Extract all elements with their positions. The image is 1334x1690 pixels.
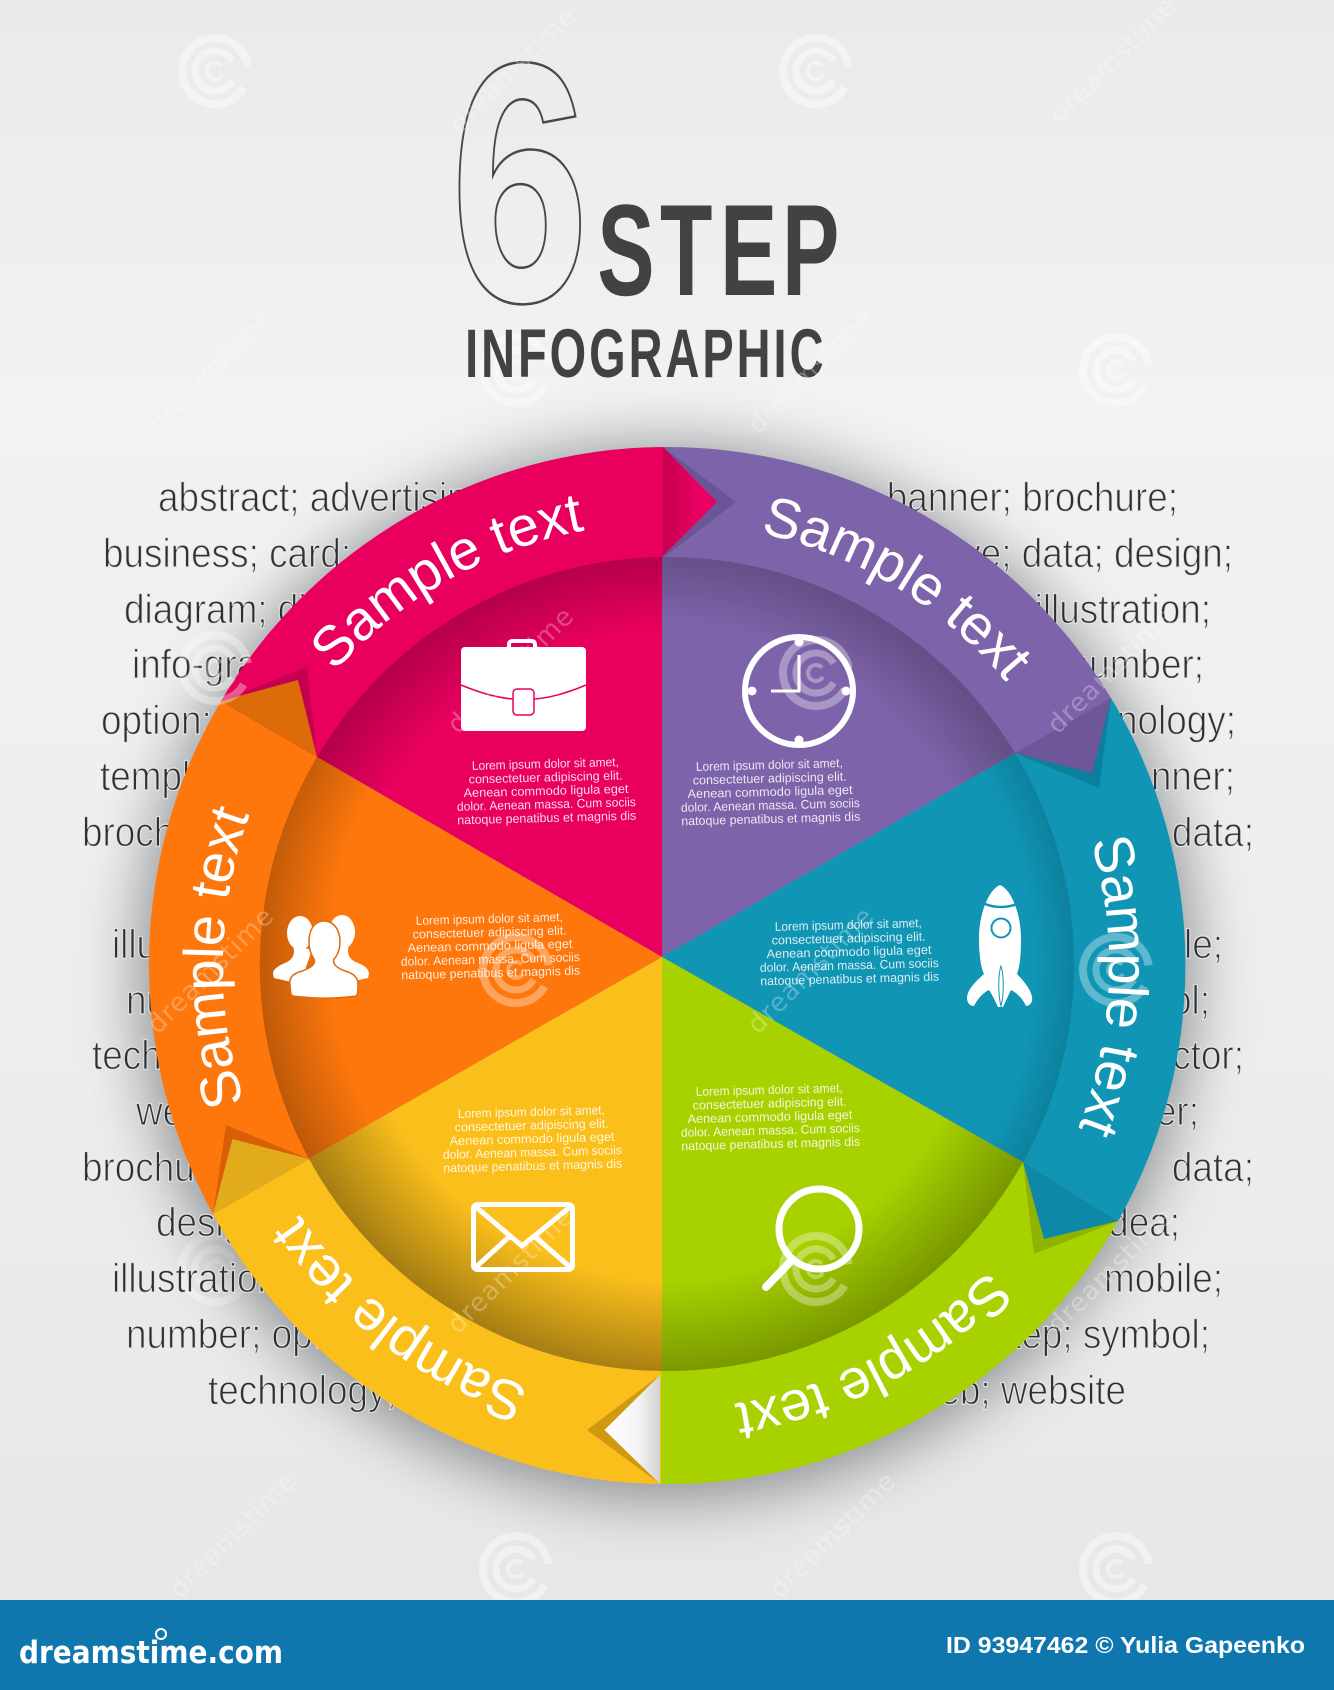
- text block: yellow: dolor. Aenean massa. Cum sociis: [443, 1143, 622, 1162]
- keyword text behind the circle: diagram; digital: [124, 587, 374, 632]
- ribbon: orange: [149, 701, 317, 1214]
- pie wheel: [260, 557, 1074, 1371]
- keyword text behind the circle: web: [135, 1089, 204, 1134]
- slice: purple: [662, 557, 1015, 957]
- diagonal watermark text: [142, 0, 1182, 1605]
- text block: purple: Lorem ipsum dolor sit amet,: [696, 756, 843, 774]
- text block: yellow: Aenean commodo ligula eget: [449, 1130, 615, 1148]
- ribbon label: pink: Sample text: [314, 496, 584, 666]
- fold: purple arrow over teal: [1015, 698, 1111, 788]
- text block: pink: Aenean commodo ligula eget: [463, 782, 629, 800]
- keyword text behind the circle: number;: [1069, 642, 1204, 687]
- keyword text behind the circle: business; card; chart: [103, 531, 444, 576]
- footer credit: ID 93947462 © Yulia Gapeenko: [946, 1632, 1305, 1658]
- keyword text behind the circle: step; symbol;: [993, 1312, 1210, 1357]
- text block: green: Aenean commodo ligula eget: [687, 1108, 853, 1126]
- text block: purple: [680, 756, 860, 828]
- text block: pink: natoque penatibus et magnis dis: [457, 809, 636, 827]
- keyword text behind the circle: technology;: [1047, 698, 1236, 743]
- word INFOGRAPHIC: INFOGRAPHIC: [465, 315, 826, 392]
- keyword text behind the circle: number: [126, 978, 251, 1023]
- text block: teal: Lorem ipsum dolor sit amet,: [775, 916, 922, 934]
- slice: pink: [317, 557, 662, 957]
- text block: purple: dolor. Aenean massa. Cum sociis: [681, 796, 860, 815]
- slice: orange: [260, 756, 662, 1158]
- footer logo text: dreamstime.com: [19, 1635, 283, 1671]
- keyword text behind the circle: web; website: [912, 1368, 1126, 1413]
- footer logo spiral: [156, 1629, 166, 1639]
- text block: pink: [456, 755, 636, 827]
- ribbon: pink: [221, 447, 663, 757]
- keyword text behind the circle: number; option: [126, 1312, 372, 1357]
- keyword text behind the circle: idea;: [1100, 1200, 1180, 1245]
- numeral 6 outline: 6: [450, 0, 589, 374]
- icon: briefcase: [461, 641, 586, 731]
- keyword text behind the circle: technology; template: [208, 1368, 548, 1413]
- ribbon: purple: [663, 447, 1111, 753]
- text block: orange: dolor. Aenean massa. Cum sociis: [401, 950, 580, 969]
- icon: envelope: [474, 1204, 572, 1270]
- text block: green: [680, 1081, 860, 1153]
- diagonal watermark text: dreamstime: [164, 1466, 302, 1605]
- slice: teal: [662, 753, 1074, 1162]
- title: [450, 0, 839, 392]
- keyword text behind the circle: template; text: [100, 754, 322, 799]
- text block: orange: Lorem ipsum dolor sit amet,: [416, 910, 563, 928]
- ribbon label: teal: Sample text: [1078, 838, 1150, 1138]
- text block: yellow: [442, 1103, 622, 1175]
- diagonal watermark text: dreamstime: [764, 1466, 902, 1605]
- text block: purple: natoque penatibus et magnis dis: [681, 810, 860, 828]
- ribbon label: orange: Sample text: [182, 806, 250, 1106]
- keyword text behind the circle: banner;: [1110, 754, 1235, 799]
- text block: green: Lorem ipsum dolor sit amet,: [696, 1081, 843, 1099]
- keyword text behind the circle: mobile;: [1104, 1256, 1223, 1301]
- keyword text behind the circle: info-graphic: [132, 642, 325, 687]
- text block: orange: consectetuer adipiscing elit.: [412, 923, 567, 942]
- diagonal watermark text: dreamstime: [442, 601, 580, 740]
- text block: pink: dolor. Aenean massa. Cum sociis: [457, 795, 636, 814]
- keyword text behind the circle: [82, 475, 1254, 1413]
- keyword text behind the circle: illustration;: [1035, 587, 1211, 632]
- icon: rocket: [967, 885, 1032, 1007]
- text block: purple: Aenean commodo ligula eget: [687, 783, 853, 801]
- word STEP: STEP: [597, 178, 839, 323]
- text block: orange: [400, 910, 580, 982]
- slice: yellow: [308, 957, 662, 1371]
- keyword text behind the circle: brochure; business: [82, 810, 394, 855]
- diagonal watermark text: dreamstime: [142, 301, 280, 440]
- keyword text behind the circle: abstract; advertising: [158, 475, 488, 520]
- text block: yellow: Lorem ipsum dolor sit amet,: [458, 1103, 605, 1121]
- keyword text behind the circle: brochure: [82, 1145, 228, 1190]
- keyword text behind the circle: symbol;: [1083, 978, 1210, 1023]
- text block: green: dolor. Aenean massa. Cum sociis: [681, 1121, 860, 1140]
- keyword text behind the circle: data;: [1172, 810, 1254, 855]
- icon: magnifier: [766, 1189, 859, 1287]
- text block: teal: [759, 916, 939, 988]
- text block: purple: consectetuer adipiscing elit.: [693, 769, 847, 788]
- slice: green: [662, 957, 1023, 1371]
- keyword text behind the circle: banner;: [1074, 1089, 1199, 1134]
- keyword text behind the circle: mobile;: [1104, 922, 1223, 967]
- diagonal watermark text: dreamstime: [1042, 601, 1180, 740]
- text block: pink: Lorem ipsum dolor sit amet,: [472, 755, 619, 773]
- text block: orange: Aenean commodo ligula eget: [407, 937, 573, 955]
- text block: yellow: natoque penatibus et magnis dis: [443, 1157, 622, 1175]
- text block: orange: natoque penatibus et magnis dis: [401, 964, 580, 982]
- text block: yellow: consectetuer adipiscing elit.: [455, 1116, 609, 1135]
- text block: green: natoque penatibus et magnis dis: [681, 1135, 860, 1153]
- fold: teal arrow over green: [1023, 1162, 1118, 1254]
- ribbon: teal: [1015, 698, 1185, 1221]
- fold: white notch between yellow and green: [587, 1375, 660, 1484]
- icon: people: [273, 915, 369, 998]
- text block: pink: consectetuer adipiscing elit.: [469, 768, 623, 787]
- text block: teal: dolor. Aenean massa. Cum sociis: [760, 956, 939, 975]
- keyword text behind the circle: banner; brochure;: [887, 475, 1178, 520]
- foreground watermark spirals: [170, 623, 1161, 1314]
- diagonal watermark text: dreamstime: [742, 901, 880, 1040]
- ribbon label: green: Sample text: [734, 1276, 1009, 1438]
- fold: pink arrow over purple: [663, 447, 736, 558]
- ribbon: green: [661, 1162, 1118, 1484]
- footer bar: [0, 1600, 1334, 1690]
- icon: clock: [745, 637, 853, 745]
- diagonal watermark text: dreamstime: [442, 1201, 580, 1340]
- diagonal watermark text: dreamstime: [142, 901, 280, 1040]
- keyword text behind the circle: data;: [1172, 1145, 1254, 1190]
- text block: teal: Aenean commodo ligula eget: [766, 943, 932, 961]
- text block: teal: natoque penatibus et magnis dis: [760, 970, 939, 988]
- fold: yellow arrow over orange: [213, 1125, 309, 1214]
- text block: green: consectetuer adipiscing elit.: [692, 1094, 847, 1113]
- keyword text behind the circle: vector;: [1133, 1033, 1244, 1078]
- keyword text behind the circle: option; process: [101, 698, 351, 743]
- fold: orange arrow over pink: [221, 667, 317, 757]
- diagonal watermark text: dreamstime: [742, 301, 880, 440]
- diagonal watermark text: dreamstime: [444, 1, 582, 140]
- text block: teal: consectetuer adipiscing elit.: [771, 929, 926, 948]
- keyword text behind the circle: creative; data; design;: [872, 531, 1233, 576]
- ribbon: yellow: [213, 1159, 661, 1484]
- keyword text behind the circle: technology: [92, 1033, 271, 1078]
- keyword text behind the circle: illustration: [112, 1256, 278, 1301]
- diagonal watermark text: dreamstime: [1042, 1201, 1180, 1340]
- ribbon label: purple: Sample text: [765, 498, 1030, 682]
- keyword text behind the circle: design: [156, 1200, 265, 1245]
- background watermark spirals: [170, 26, 1161, 1614]
- circle drop shadow: [138, 444, 1194, 1500]
- keyword text behind the circle: illustration: [112, 922, 278, 967]
- ribbon label: yellow: Sample text: [273, 1215, 524, 1420]
